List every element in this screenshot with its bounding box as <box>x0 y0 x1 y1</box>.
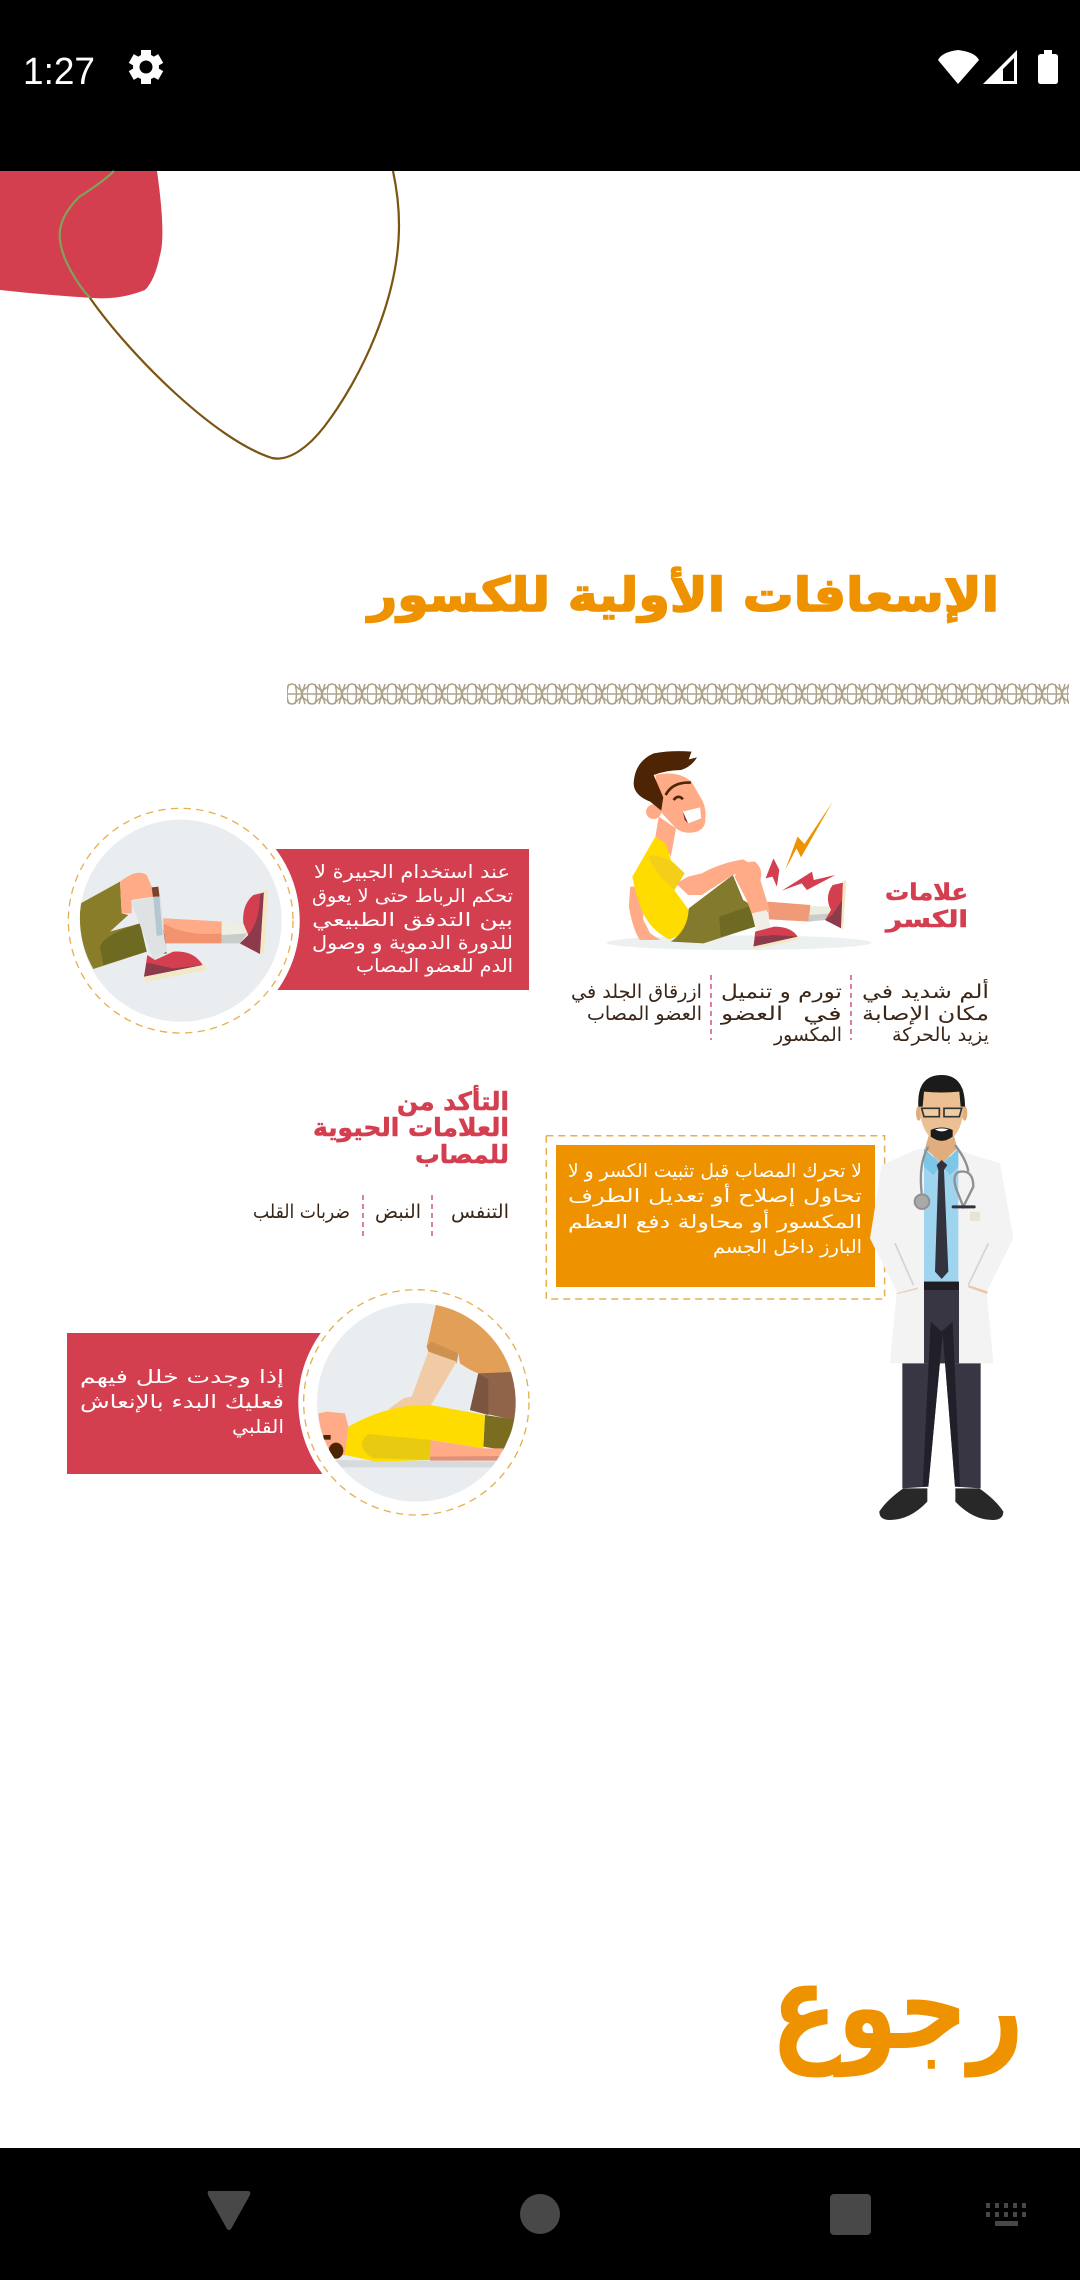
text column: bruising: ازرقاق الجلد في <box>571 981 702 1003</box>
text column: pain <box>862 979 989 1046</box>
heading: signs of fracture: علامات <box>885 880 968 906</box>
panel: CPR advice: القلبي <box>232 1417 284 1438</box>
panel: do not move the casualty: البارز داخل الجسم <box>713 1237 862 1258</box>
navigation bar <box>0 2148 1080 2280</box>
icon: battery <box>1038 50 1058 84</box>
text column: swelling: العضو <box>720 1003 783 1025</box>
panel: do not move the casualty <box>546 1136 885 1299</box>
panel: splint advice: عند استخدام الجبيرة لا <box>314 862 510 883</box>
illustration: splinted leg in circle <box>68 808 293 1033</box>
heading: check vital signs <box>313 1085 509 1169</box>
heading: check vital signs: العلامات الحيوية <box>313 1113 509 1143</box>
illustration: boy in pain holding his leg <box>606 751 872 950</box>
heading: signs of fracture: الكسر <box>885 907 968 933</box>
panel: splint advice: تحكم الرباط حتى لا يعوق <box>312 886 513 907</box>
icon: keyboard <box>986 2203 1026 2226</box>
text column: swelling: تورم و تنميل <box>721 981 842 1003</box>
text column: pain: ألم شديد في <box>862 979 989 1003</box>
icon: red lightning left <box>766 858 779 887</box>
panel: splint advice <box>62 802 529 1040</box>
heading: check vital signs: التأكد من <box>397 1085 509 1117</box>
vital signs list: التنفس <box>451 1201 509 1223</box>
text column: swelling: في <box>803 1003 842 1025</box>
text column: swelling <box>720 981 842 1046</box>
panel: splint advice: بين التدفق الطبيعي <box>312 910 513 931</box>
icon: back <box>208 2191 250 2230</box>
icon: home <box>520 2194 560 2234</box>
title: الإسعافات الأولية للكسور <box>366 566 999 623</box>
text column: pain: مكان الإصابة <box>862 1003 989 1025</box>
heading: check vital signs: للمصاب <box>415 1140 509 1169</box>
icon: settings gear <box>129 50 163 84</box>
clock: 1:27 <box>23 51 95 93</box>
panel: do not move the casualty: لا تحرك المصاب قبل تثبيت الكسر و لا <box>568 1161 862 1182</box>
vital signs list: النبض <box>375 1201 421 1223</box>
text column: bruising <box>571 981 702 1025</box>
text column: pain: يزيد بالحركة <box>892 1024 989 1046</box>
decorative red blob <box>0 171 162 298</box>
panel: splint advice: للدورة الدموية و وصول <box>312 933 513 954</box>
panel: do not move the casualty: المكسور أو محاولة دفع العظم <box>568 1209 862 1233</box>
ornamental pattern band <box>287 683 1069 705</box>
illustration: doctor <box>870 1075 1013 1520</box>
panel: CPR advice: إذا وجدت خلل فيهم <box>80 1367 284 1388</box>
vital signs list: ضربات القلب <box>253 1201 350 1223</box>
illustration: chest compressions in circle <box>304 1290 529 1515</box>
panel: CPR advice: فعليك البدء بالإنعاش <box>80 1392 284 1413</box>
panel: splint advice: الدم للعضو المصاب <box>356 956 513 977</box>
icon: recents <box>830 2194 871 2235</box>
icon: orange lightning <box>785 802 833 870</box>
icon: signal <box>983 50 1017 84</box>
text column: bruising: العضو المصاب <box>587 1003 702 1025</box>
decorative curve <box>60 171 399 459</box>
panel: do not move the casualty: تحاول إصلاح أو تعديل الطرف <box>568 1183 862 1207</box>
icon: wifi <box>938 50 979 84</box>
icon: red lightning right <box>782 872 835 891</box>
heading: signs of fracture <box>885 880 968 933</box>
status bar <box>0 0 1080 171</box>
back button label: رجوع <box>771 1938 1024 2077</box>
panel: CPR advice <box>67 1284 534 1520</box>
text column: swelling: المكسور <box>773 1024 842 1046</box>
vital signs list <box>253 1195 509 1240</box>
